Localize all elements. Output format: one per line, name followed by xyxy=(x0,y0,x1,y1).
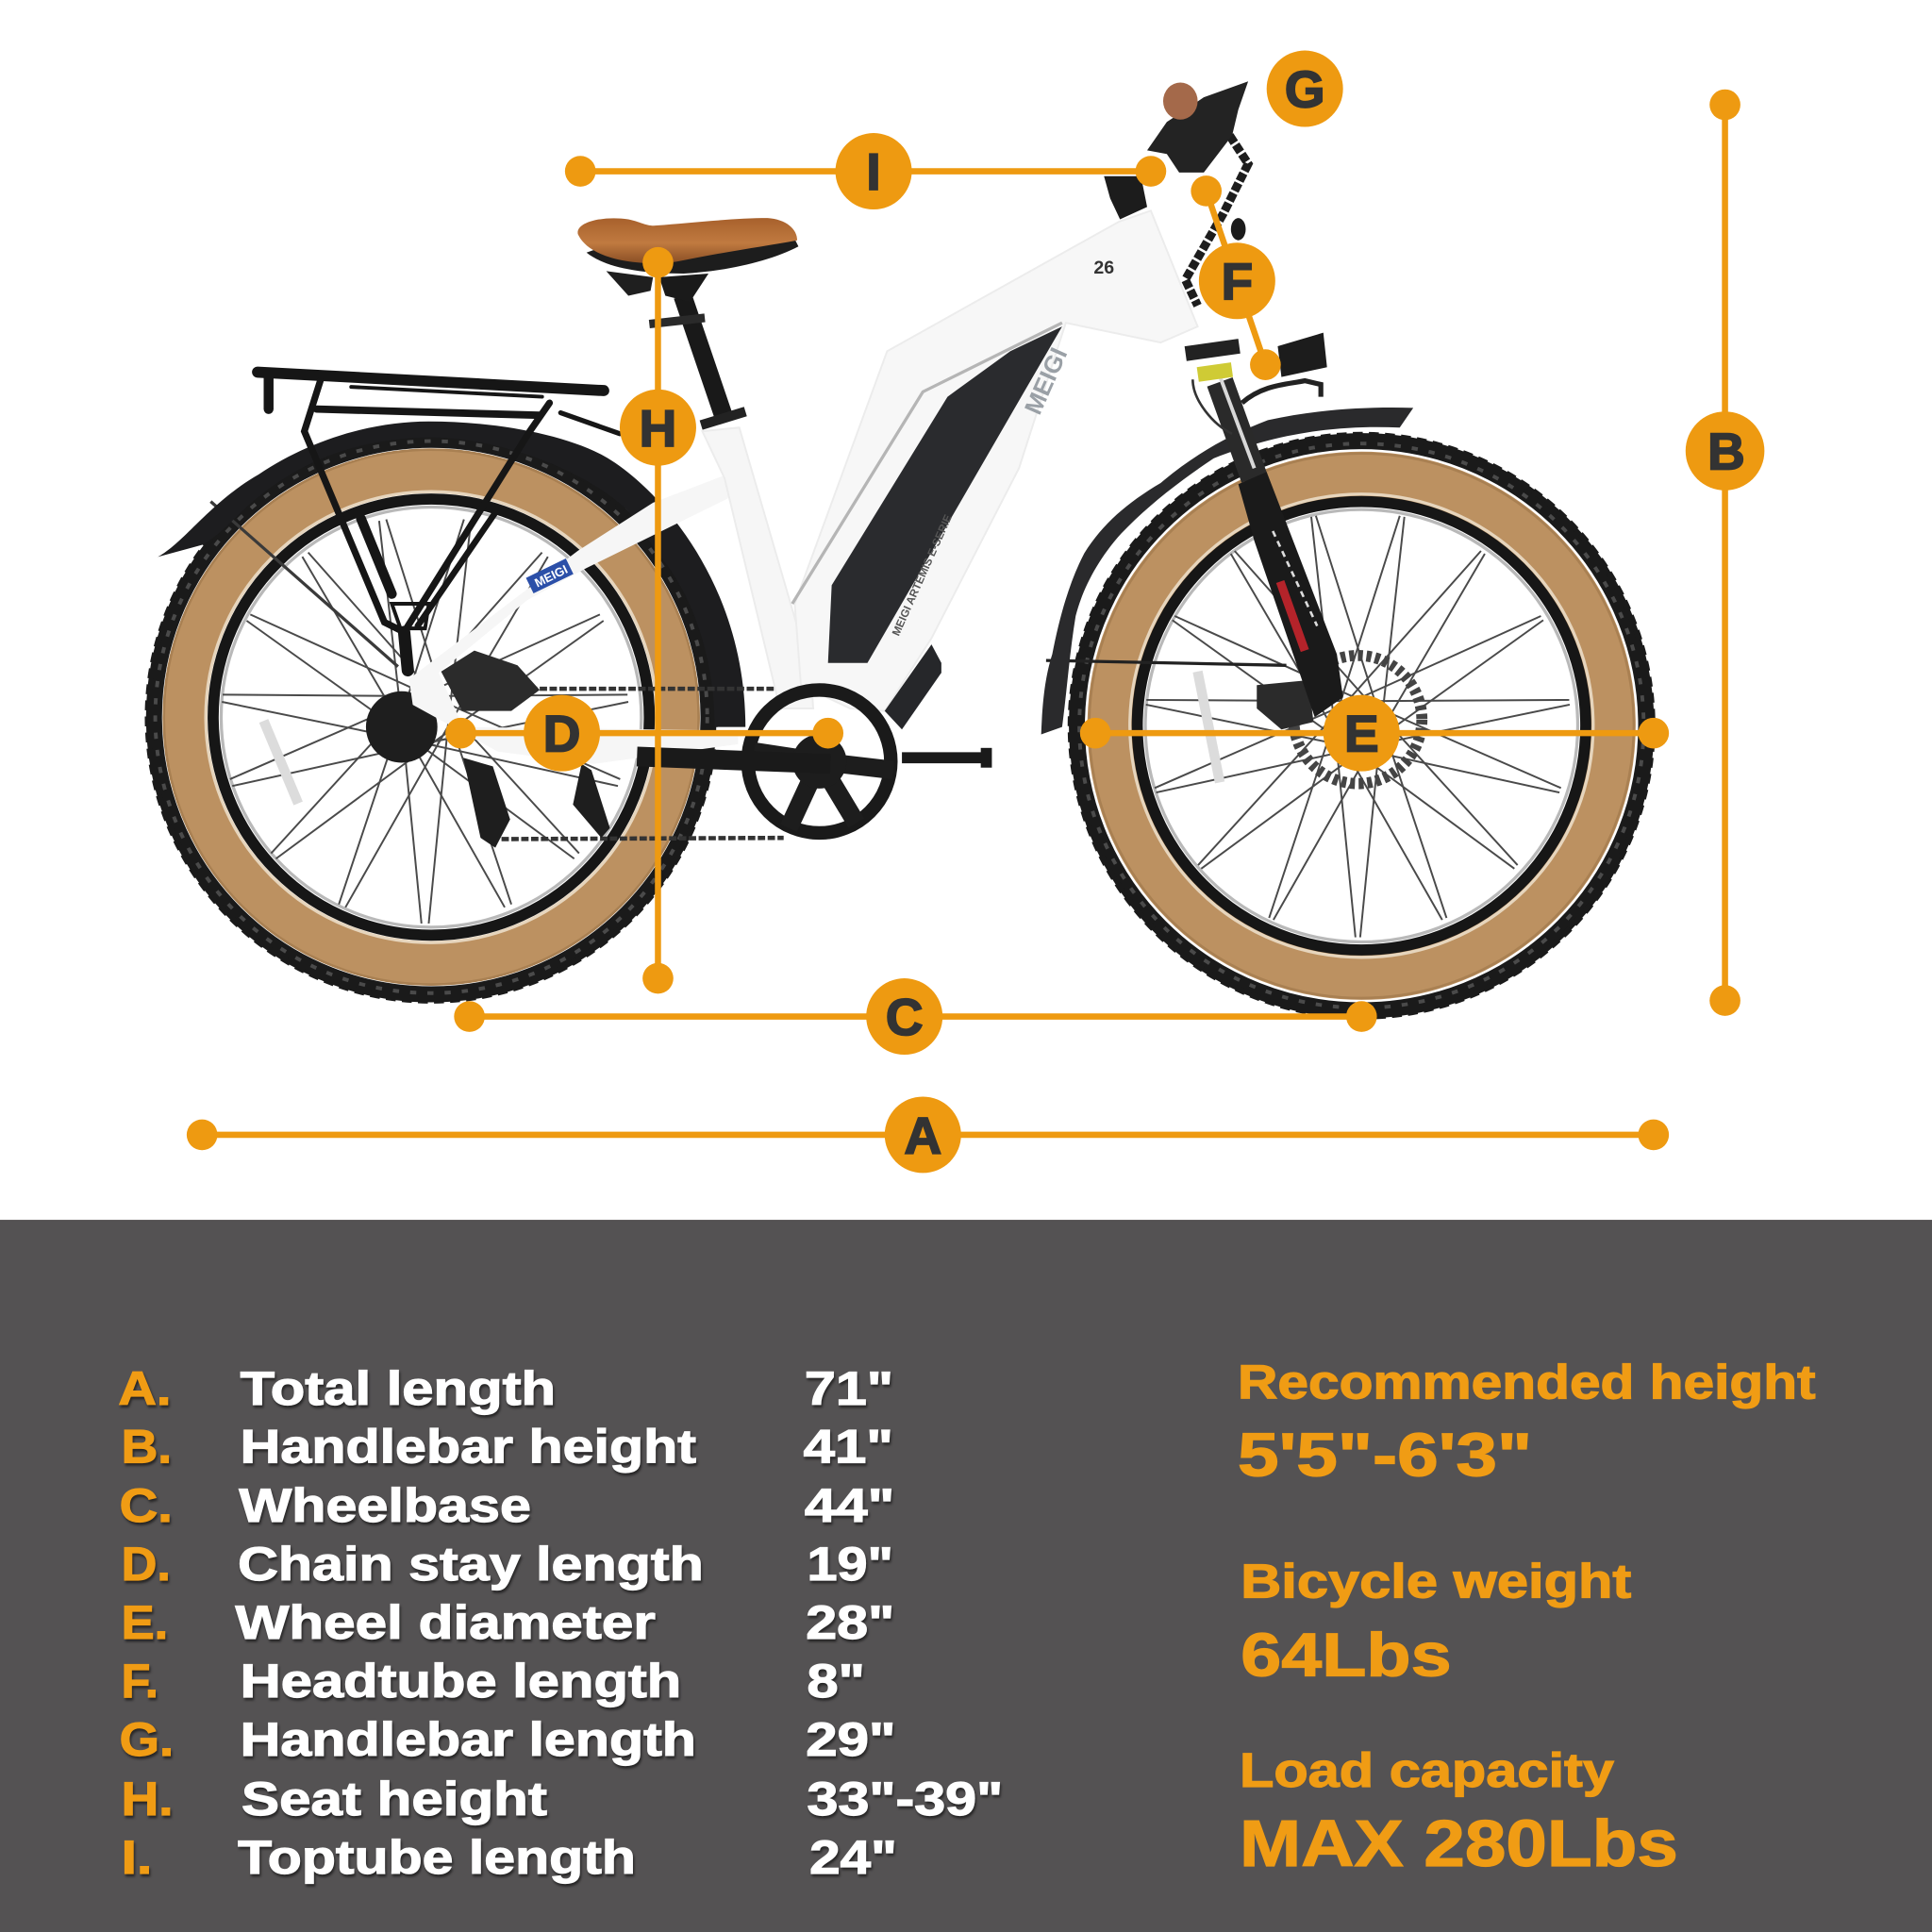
row A: A. xyxy=(118,1362,172,1415)
stat: recommended height xyxy=(1238,1355,1816,1490)
row E: E. xyxy=(122,1596,168,1649)
row I: 24" xyxy=(809,1831,897,1884)
row B: 41" xyxy=(804,1420,893,1473)
row H xyxy=(122,1773,1003,1825)
stat: load capacity: Load capacity xyxy=(1240,1743,1615,1797)
grip xyxy=(1163,83,1198,120)
seatpost xyxy=(683,295,724,415)
frame lettering: MEIGI ARTEMIS E-SERIE xyxy=(890,512,955,638)
dimension I: I xyxy=(866,142,881,201)
chainring and crank xyxy=(637,690,991,833)
seat clamp xyxy=(701,411,745,425)
frame xyxy=(794,210,1198,711)
dimension D xyxy=(445,695,843,772)
front brake lever line xyxy=(1242,381,1321,403)
measurement list xyxy=(118,1362,1003,1884)
row G xyxy=(120,1713,896,1766)
row E: 28" xyxy=(806,1596,894,1649)
dimension H xyxy=(620,247,696,993)
brand badge: MEIGI xyxy=(532,562,570,590)
row H: 33"-39" xyxy=(808,1773,1003,1825)
row A: 71" xyxy=(805,1362,893,1415)
dimension D: D xyxy=(543,705,580,763)
dimension A xyxy=(187,1096,1669,1173)
dimension C xyxy=(454,978,1377,1055)
dimension G xyxy=(1267,51,1343,127)
row I: Toptube length xyxy=(238,1831,636,1884)
rear rack xyxy=(258,372,620,671)
row D: 19" xyxy=(808,1538,893,1591)
fork xyxy=(1185,339,1343,717)
row F: 8" xyxy=(808,1655,865,1707)
row F xyxy=(122,1655,865,1707)
stat: load capacity xyxy=(1240,1743,1678,1880)
handlebar controls xyxy=(1147,81,1248,173)
seat tube xyxy=(702,427,813,708)
stat: bicycle weight: Bicycle weight xyxy=(1241,1554,1631,1607)
dimension F xyxy=(1191,175,1281,380)
dimension E: E xyxy=(1344,705,1379,763)
cables xyxy=(1185,136,1248,306)
row G: G. xyxy=(120,1713,174,1766)
rear derailleur and kickstand plate xyxy=(463,758,610,848)
stem xyxy=(1104,176,1147,219)
frame inner line xyxy=(792,323,1062,604)
row G: 29" xyxy=(806,1713,896,1766)
row F: F. xyxy=(122,1655,158,1707)
dimension B xyxy=(1686,90,1764,1016)
seat stay and chain stay xyxy=(409,475,740,764)
front wheel xyxy=(1046,435,1653,1017)
motor xyxy=(885,644,941,729)
brand wordmark on frame: MEIGI xyxy=(1019,343,1073,419)
dimension A: A xyxy=(904,1107,941,1165)
row H: H. xyxy=(122,1773,174,1825)
rear fender xyxy=(158,422,745,727)
stat: recommended height: Recommended height xyxy=(1238,1355,1816,1408)
saddle xyxy=(577,218,798,302)
dimension H: H xyxy=(640,399,676,458)
stat: load capacity: MAX 280Lbs xyxy=(1240,1807,1678,1880)
row C: Wheelbase xyxy=(239,1479,531,1532)
row A: Total length xyxy=(241,1362,556,1415)
row B: B. xyxy=(122,1420,172,1473)
row C: C. xyxy=(120,1479,173,1532)
panel: specifications xyxy=(0,1220,1932,1932)
headlight xyxy=(1277,333,1327,377)
stat: bicycle weight xyxy=(1241,1554,1631,1689)
row I xyxy=(122,1831,897,1884)
row B: Handlebar height xyxy=(241,1420,696,1473)
stat: bicycle weight: 64Lbs xyxy=(1241,1620,1452,1689)
row C: 44" xyxy=(805,1479,894,1532)
seat post bolt xyxy=(649,318,705,325)
cable knob xyxy=(1231,218,1245,241)
row E xyxy=(122,1596,894,1649)
dimension B: B xyxy=(1707,423,1745,481)
row D: Chain stay length xyxy=(238,1538,704,1591)
row D: D. xyxy=(122,1538,171,1591)
row D xyxy=(122,1538,893,1591)
brand badge xyxy=(526,558,574,593)
battery xyxy=(828,326,1062,663)
dimension G: G xyxy=(1285,60,1325,119)
bike illustration xyxy=(148,81,1653,1017)
row G: Handlebar length xyxy=(241,1713,696,1766)
brake caliper and rear gear cluster xyxy=(366,651,540,762)
row E: Wheel diameter xyxy=(235,1596,656,1649)
row B xyxy=(122,1420,893,1473)
front fender xyxy=(1041,408,1413,734)
stat: recommended height: 5'5"-6'3" xyxy=(1238,1421,1532,1490)
dimension C: C xyxy=(886,988,923,1046)
dimension I xyxy=(565,133,1166,209)
frame number: 26 xyxy=(1093,258,1114,278)
row C xyxy=(120,1479,894,1532)
rear wheel xyxy=(148,434,715,1001)
row H: Seat height xyxy=(242,1773,547,1825)
row I: I. xyxy=(122,1831,152,1884)
row F: Headtube length xyxy=(241,1655,681,1707)
row A xyxy=(118,1362,893,1415)
dimension E xyxy=(1080,695,1669,772)
chain xyxy=(451,689,784,839)
dimension F: F xyxy=(1222,252,1253,310)
